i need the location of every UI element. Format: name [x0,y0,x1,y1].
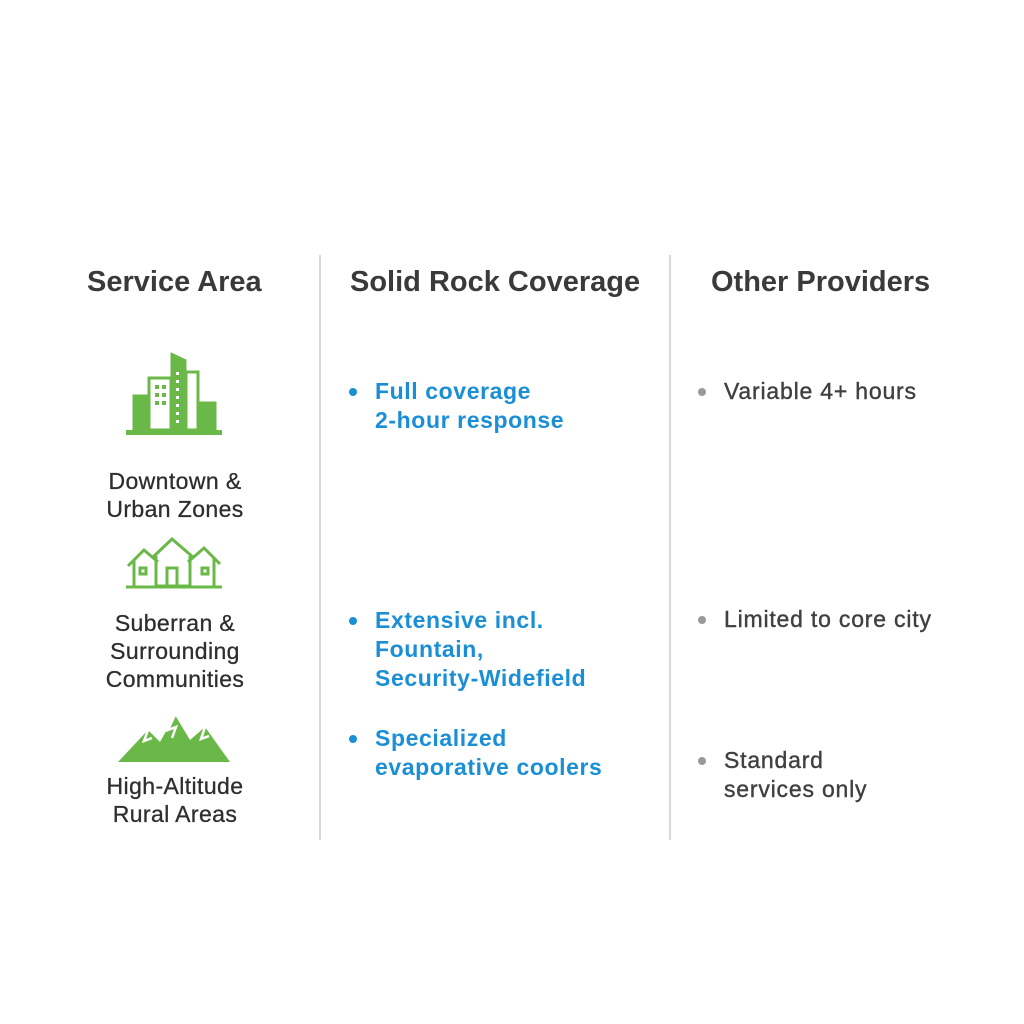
icon: houses [126,537,222,588]
text: full coverage: 2-hour response [375,407,564,433]
label: rural: High-Altitude [107,773,243,799]
text: standard [698,747,867,802]
heading: service area: Service Area [87,266,262,298]
label: downtown: Urban Zones [106,496,244,522]
icon: mountains [118,715,230,762]
label: suburban: Surrounding [110,638,240,664]
text: specialized: evaporative coolers [375,754,602,780]
text: extensive: Fountain, [375,636,484,662]
label: downtown [106,468,244,522]
text: standard: services only [724,776,867,802]
text: full coverage: Full coverage [375,378,531,404]
text: extensive: Security-Widefield [375,665,586,691]
label: suburban: Suberran & [115,610,235,636]
icon: buildings [126,352,222,435]
heading: other providers: Other Providers [711,266,930,298]
text: specialized [349,725,602,780]
text: extensive [349,607,586,691]
label: suburban [106,610,244,692]
text: standard: Standard [724,747,824,773]
label: rural: Rural Areas [113,801,237,827]
text: limited: Limited to core city [724,606,932,632]
label: rural [107,773,243,827]
heading: solid rock coverage: Solid Rock Coverage [350,266,640,298]
text: variable: Variable 4+ hours [724,378,917,404]
text: specialized: Specialized [375,725,507,751]
text: full coverage [349,378,564,433]
label: suburban: Communities [106,666,244,692]
text: extensive: Extensive incl. [375,607,544,633]
label: downtown: Downtown & [108,468,242,494]
